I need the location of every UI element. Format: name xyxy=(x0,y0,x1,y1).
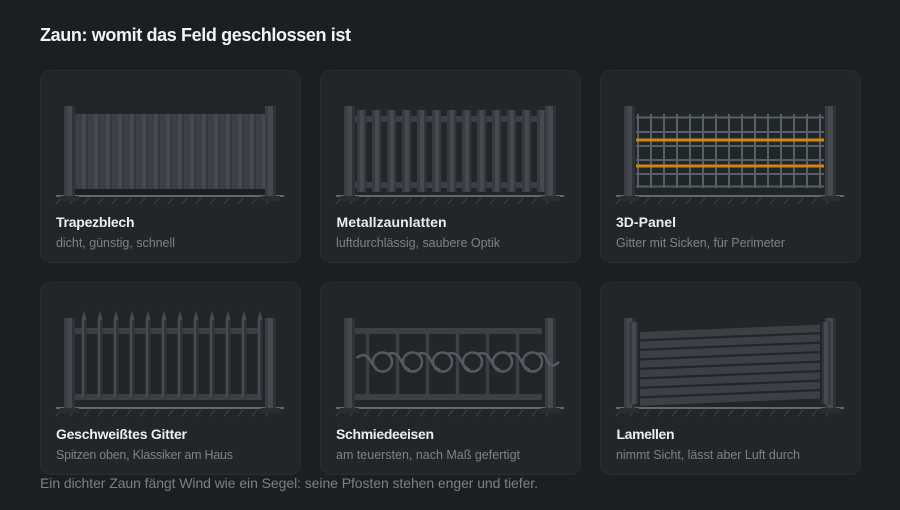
description: 3D-Panel: Gitter mit Sicken, für Perimeter xyxy=(616,236,785,250)
panel: Lamellen xyxy=(600,282,860,474)
name: Schmiedeeisen: Schmiedeeisen xyxy=(336,426,434,442)
name: Metallzaunlatten: Metallzaunlatten xyxy=(336,214,446,230)
orange stripes xyxy=(636,140,824,166)
description: Schmiedeeisen: am teuersten, nach Maß gefertigt xyxy=(336,448,521,462)
name: 3D-Panel: 3D-Panel xyxy=(616,214,676,230)
illustration: Lamellen fence xyxy=(616,318,844,416)
description: Metallzaunlatten: luftdurchlässig, saubere Optik xyxy=(336,236,501,250)
panel: Trapezblech xyxy=(40,70,300,262)
panel: Schmiedeeisen xyxy=(320,282,580,474)
illustration: 3D-Panel fence xyxy=(616,106,844,204)
footnote: Ein dichter Zaun fängt Wind wie ein Segel: seine Pfosten stehen enger und tiefer. xyxy=(40,475,538,491)
panel: 3D-Panel xyxy=(600,70,860,262)
panel: Geschweißtes Gitter xyxy=(40,282,300,474)
name: Lamellen: Lamellen xyxy=(616,426,674,442)
description: Trapezblech: dicht, günstig, schnell xyxy=(56,236,175,250)
scrollwork xyxy=(356,352,559,372)
illustration: Metallzaunlatten fence xyxy=(336,106,564,204)
illustration: Schmiedeeisen fence xyxy=(336,318,564,416)
description: Lamellen: nimmt Sicht, lässt aber Luft durch xyxy=(616,448,800,462)
title: Zaun: womit das Feld geschlossen ist xyxy=(40,25,351,45)
name: Geschweißtes Gitter: Geschweißtes Gitter xyxy=(56,426,188,442)
slats xyxy=(640,325,820,406)
illustration: Trapezblech fence xyxy=(56,106,284,204)
name: Trapezblech: Trapezblech xyxy=(56,214,134,230)
description: Geschweißtes Gitter: Spitzen oben, Klassiker am Haus xyxy=(56,448,233,462)
illustration: Geschweißtes Gitter fence xyxy=(56,311,284,416)
panel: Metallzaunlatten xyxy=(320,70,580,262)
